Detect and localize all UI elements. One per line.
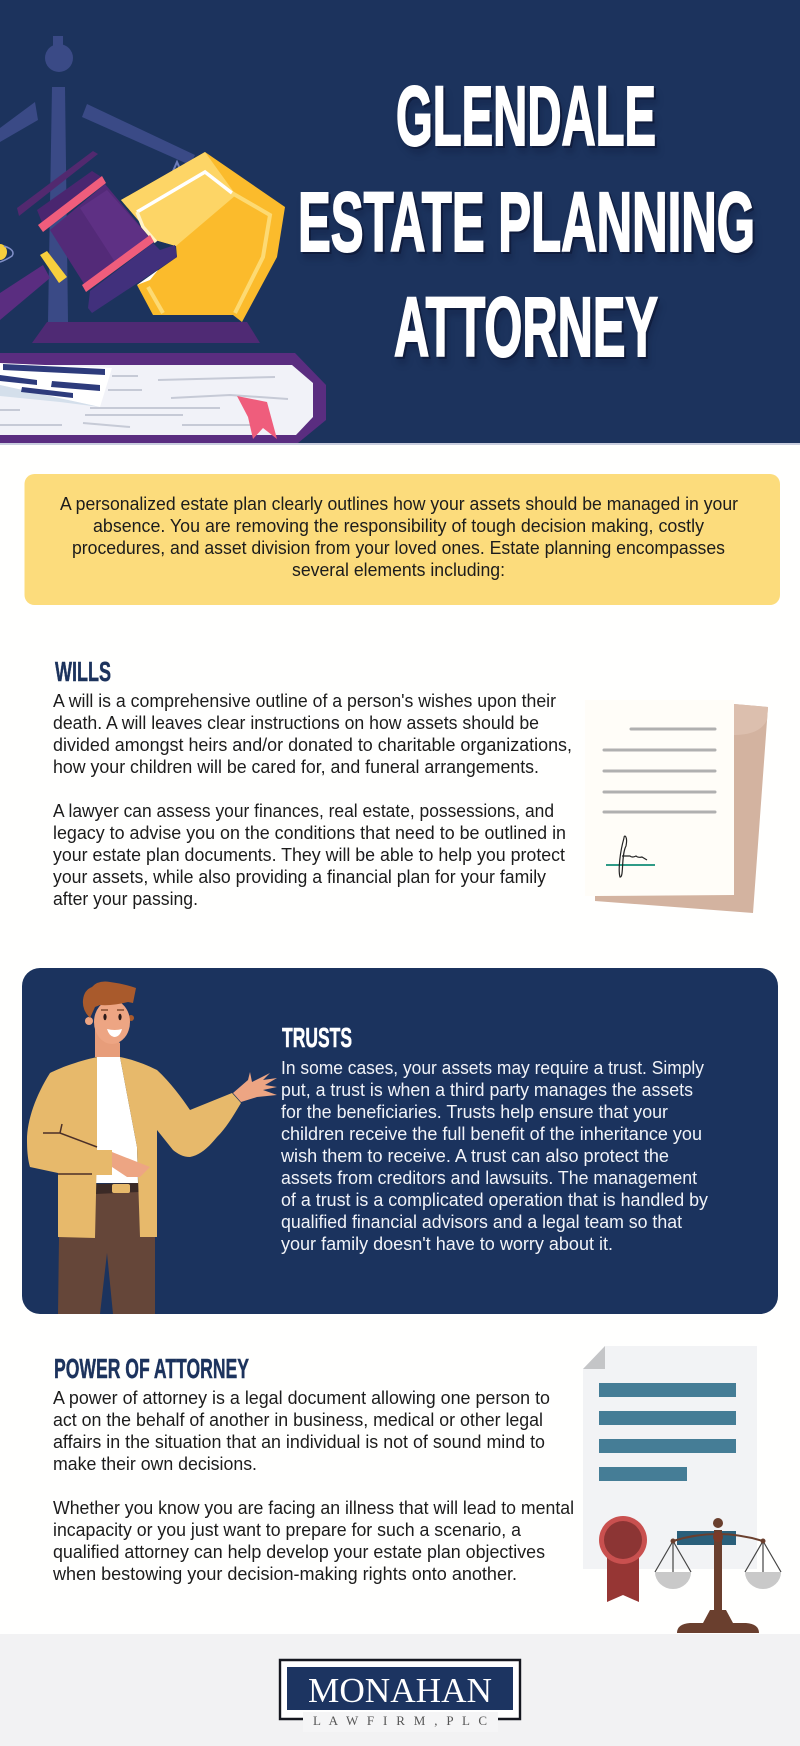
logo: MONAHAN	[308, 1671, 492, 1710]
wills text: divided amongst heirs and/or donated to charitable organizations,	[53, 735, 572, 755]
section: wills	[53, 656, 768, 913]
trusts text: put, a trust is when a third party manages the assets	[281, 1080, 693, 1100]
power of attorney text: when bestowing your decision-making rights onto another.	[52, 1564, 517, 1584]
icon: signed document	[585, 700, 768, 913]
power of attorney text: A power of attorney is a legal document allowing one person to	[53, 1388, 550, 1408]
heading: wills: WILLS	[55, 656, 111, 687]
trusts text: of a trust is a complicated operation that is handled by	[281, 1190, 708, 1210]
power of attorney text: affairs in the situation that an individual is not of sound mind to	[53, 1432, 545, 1452]
wills text: A will is a comprehensive outline of a person's wishes upon their	[53, 691, 556, 711]
wills text: legacy to advise you on the conditions that need to be outlined in	[53, 823, 566, 843]
wills text: death. A will leaves clear instructions on how assets should be	[53, 713, 539, 733]
trusts text: qualified financial advisors and a legal team so that	[281, 1212, 682, 1232]
trusts text: for the beneficiaries. Trusts help ensure that your	[281, 1102, 668, 1122]
icon: background scale	[0, 36, 195, 322]
wills text: your estate plan documents. They will be able to help you protect	[53, 845, 565, 865]
intro text: procedures, and asset division from your loved ones. Estate planning encompasses	[72, 538, 725, 558]
wills text	[53, 691, 572, 909]
section: power of attorney	[52, 1346, 781, 1633]
trusts text	[280, 1058, 708, 1254]
power of attorney text: make their own decisions.	[53, 1454, 257, 1474]
intro text: several elements including:	[292, 560, 505, 580]
intro text: absence. You are removing the responsibility of tough decision making, costly	[93, 516, 704, 536]
panel: trusts	[22, 968, 778, 1314]
trusts text: assets from creditors and lawsuits. The management	[281, 1168, 697, 1188]
illustration: presenter	[27, 982, 277, 1314]
heading: power of attorney: POWER OF ATTORNEY	[54, 1353, 249, 1384]
icon: legal document	[583, 1346, 781, 1633]
header banner	[0, 0, 800, 445]
heading: trusts: TRUSTS	[282, 1022, 352, 1053]
power of attorney text: qualified attorney can help develop your estate plan objectives	[53, 1542, 545, 1562]
icon: seal ribbon	[599, 1516, 647, 1602]
wills text: how your children will be cared for, and funeral arrangements.	[53, 757, 539, 777]
power of attorney text: act on the behalf of another in business, medical or other legal	[53, 1410, 543, 1430]
trusts text: your family doesn't have to worry about it.	[281, 1234, 613, 1254]
trusts text: In some cases, your assets may require a trust. Simply	[281, 1058, 704, 1078]
wills text: A lawyer can assess your finances, real estate, possessions, and	[53, 801, 554, 821]
panel: intro	[24, 474, 780, 605]
intro text	[60, 494, 738, 580]
wills text: after your passing.	[53, 889, 198, 909]
wills text: your assets, while also providing a financial plan for your family	[53, 867, 546, 887]
title	[298, 69, 755, 374]
icon: shield	[121, 152, 285, 322]
footer	[0, 1634, 800, 1746]
logo	[279, 1659, 521, 1732]
power of attorney text: Whether you know you are facing an illness that will lead to mental	[53, 1498, 574, 1518]
intro text: A personalized estate plan clearly outlines how your assets should be managed in your	[60, 494, 738, 514]
trusts text: children receive the full benefit of the inheritance you	[281, 1124, 702, 1144]
icon: book	[0, 353, 326, 443]
icon: gavel	[0, 151, 177, 320]
logo: L A W F I R M , P L C	[313, 1713, 487, 1728]
icon: scales of justice	[655, 1518, 781, 1633]
power of attorney text: incapacity or you just want to prepare for such a scenario, a	[53, 1520, 522, 1540]
trusts text: wish them to receive. A trust can also protect the	[280, 1146, 669, 1166]
icon: scale base	[32, 322, 260, 343]
power of attorney text	[52, 1388, 574, 1584]
